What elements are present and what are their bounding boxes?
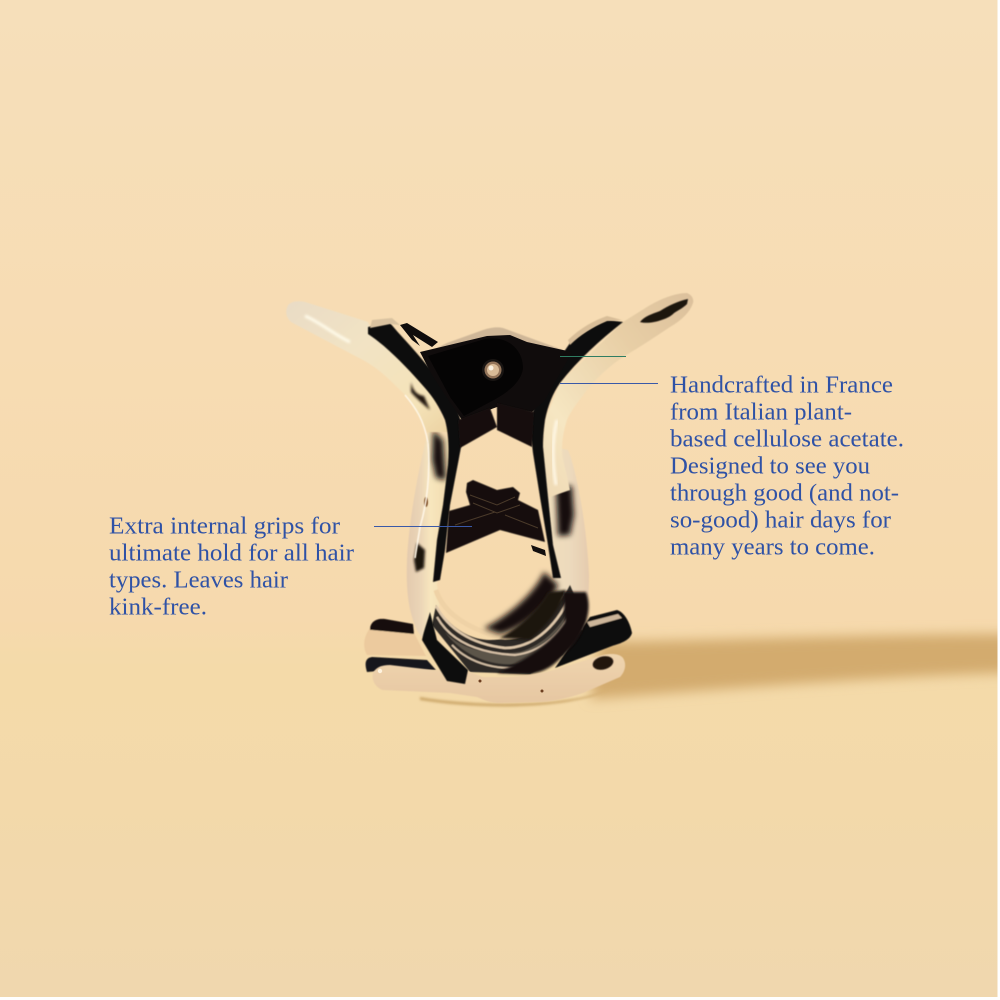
leader line: acetate callout (560, 382, 658, 384)
callout: handcrafted in France: from Italian plant- (670, 400, 852, 426)
tortoise spots on the left column (414, 430, 446, 572)
inner coil strands (432, 585, 585, 674)
right arm (543, 293, 693, 497)
contact shadow (420, 690, 610, 706)
tortoise spot on the right column (556, 486, 574, 536)
leader line: grips callout (374, 526, 472, 528)
left arm (286, 301, 449, 443)
left base black patch (422, 612, 468, 684)
translucent side loops (407, 432, 450, 650)
leader line: top right (green) (560, 356, 626, 358)
hair claw clip (286, 293, 693, 706)
callout: handcrafted in France: many years to come. (670, 534, 875, 560)
internal grips (446, 480, 546, 556)
left black rim (368, 323, 462, 582)
callout: internal grips: types. Leaves hair (109, 568, 288, 594)
front foot (373, 654, 625, 703)
callout: handcrafted in France: Handcrafted in France (670, 372, 893, 398)
callout: internal grips: kink-free. (109, 594, 207, 620)
back feet (364, 610, 632, 672)
callout: handcrafted in France: so-good) hair days for (670, 508, 891, 534)
upper grip (458, 403, 534, 448)
pivot plate with rivet (400, 323, 572, 420)
callout: handcrafted in France (670, 372, 904, 560)
callout: handcrafted in France: through good (and not- (670, 480, 899, 506)
callout: handcrafted in France: Designed to see you (670, 454, 870, 480)
right base black band (497, 592, 589, 674)
callout: internal grips: Extra internal grips for (109, 514, 340, 540)
callout: handcrafted in France: based cellulose acetate. (670, 426, 904, 452)
callout: internal grips (109, 514, 354, 620)
cast shadow of the clip (590, 634, 1000, 699)
right black rim (530, 320, 623, 578)
callout: internal grips: ultimate hold for all hair (109, 540, 354, 566)
